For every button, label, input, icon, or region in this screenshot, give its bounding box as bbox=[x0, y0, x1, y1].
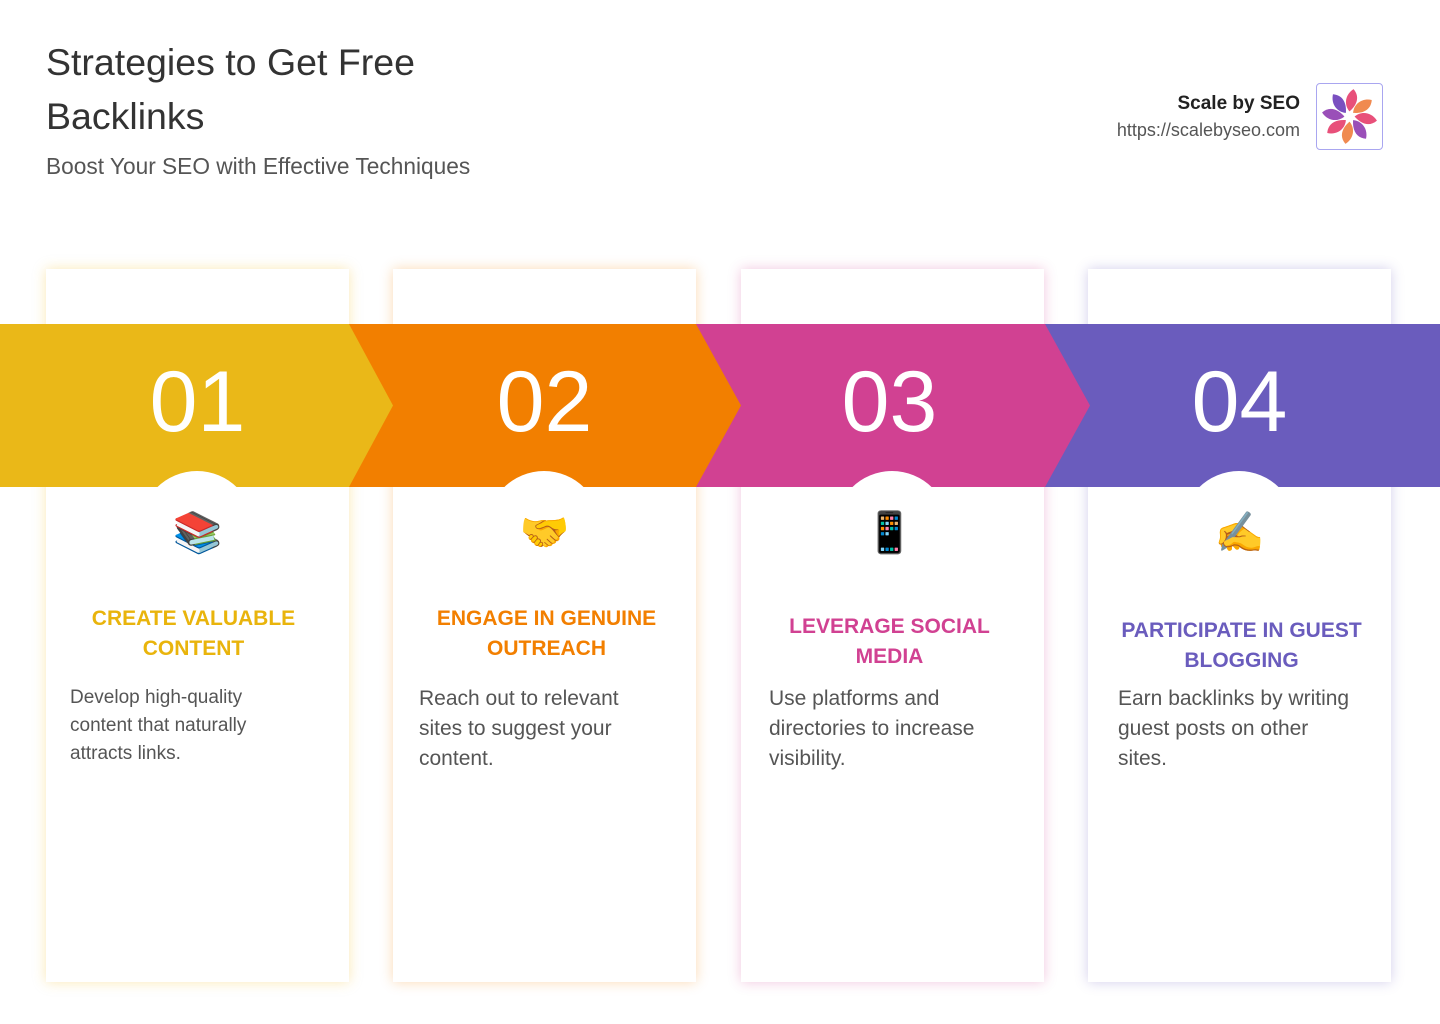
text: 🤝 bbox=[520, 509, 569, 556]
numbers: 01 bbox=[150, 354, 245, 450]
descriptions: content that naturally bbox=[70, 715, 246, 736]
headings: CREATE VALUABLE bbox=[92, 607, 295, 630]
logo bbox=[1316, 83, 1383, 150]
card 3 bbox=[741, 269, 1044, 982]
text: ENGAGE IN GENUINE bbox=[437, 607, 656, 630]
text: Use platforms and bbox=[769, 687, 939, 710]
text: MEDIA bbox=[856, 645, 923, 668]
text: sites to suggest your bbox=[419, 717, 612, 740]
text: sites. bbox=[1118, 747, 1167, 770]
chevron band bbox=[0, 324, 1440, 487]
text: Reach out to relevant bbox=[419, 687, 619, 710]
text: Earn backlinks by writing bbox=[1118, 687, 1349, 710]
brand text bbox=[1117, 93, 1300, 140]
icons: 📚 bbox=[173, 509, 222, 556]
headings: CONTENT bbox=[143, 637, 244, 660]
text: BLOGGING bbox=[1184, 649, 1299, 672]
card 1 bbox=[46, 269, 349, 982]
card 2 bbox=[393, 269, 696, 982]
text: directories to increase bbox=[769, 717, 974, 740]
title: Backlinks bbox=[46, 95, 204, 137]
white cover below band bbox=[46, 487, 349, 982]
text: OUTREACH bbox=[487, 637, 606, 660]
text: 03 bbox=[842, 354, 937, 450]
text: visibility. bbox=[769, 747, 846, 770]
text: 02 bbox=[497, 354, 592, 450]
text: 04 bbox=[1192, 354, 1287, 450]
subtitle: Boost Your SEO with Effective Techniques bbox=[46, 153, 470, 179]
brand text: https://scalebyseo.com bbox=[1117, 120, 1300, 140]
descriptions: Develop high-quality bbox=[70, 687, 242, 708]
title: Strategies to Get Free bbox=[46, 41, 415, 83]
text: guest posts on other bbox=[1118, 717, 1308, 740]
text: ✍️ bbox=[1215, 509, 1264, 556]
title bbox=[46, 41, 415, 137]
descriptions bbox=[70, 687, 246, 764]
card 4 bbox=[1088, 269, 1391, 982]
text: PARTICIPATE IN GUEST bbox=[1121, 619, 1362, 642]
text: content. bbox=[419, 747, 494, 770]
headings bbox=[92, 607, 295, 660]
text: 📱 bbox=[865, 509, 914, 556]
circles bbox=[140, 471, 254, 585]
brand text: Scale by SEO bbox=[1177, 93, 1300, 114]
descriptions: attracts links. bbox=[70, 743, 181, 764]
text: LEVERAGE SOCIAL bbox=[789, 615, 990, 638]
